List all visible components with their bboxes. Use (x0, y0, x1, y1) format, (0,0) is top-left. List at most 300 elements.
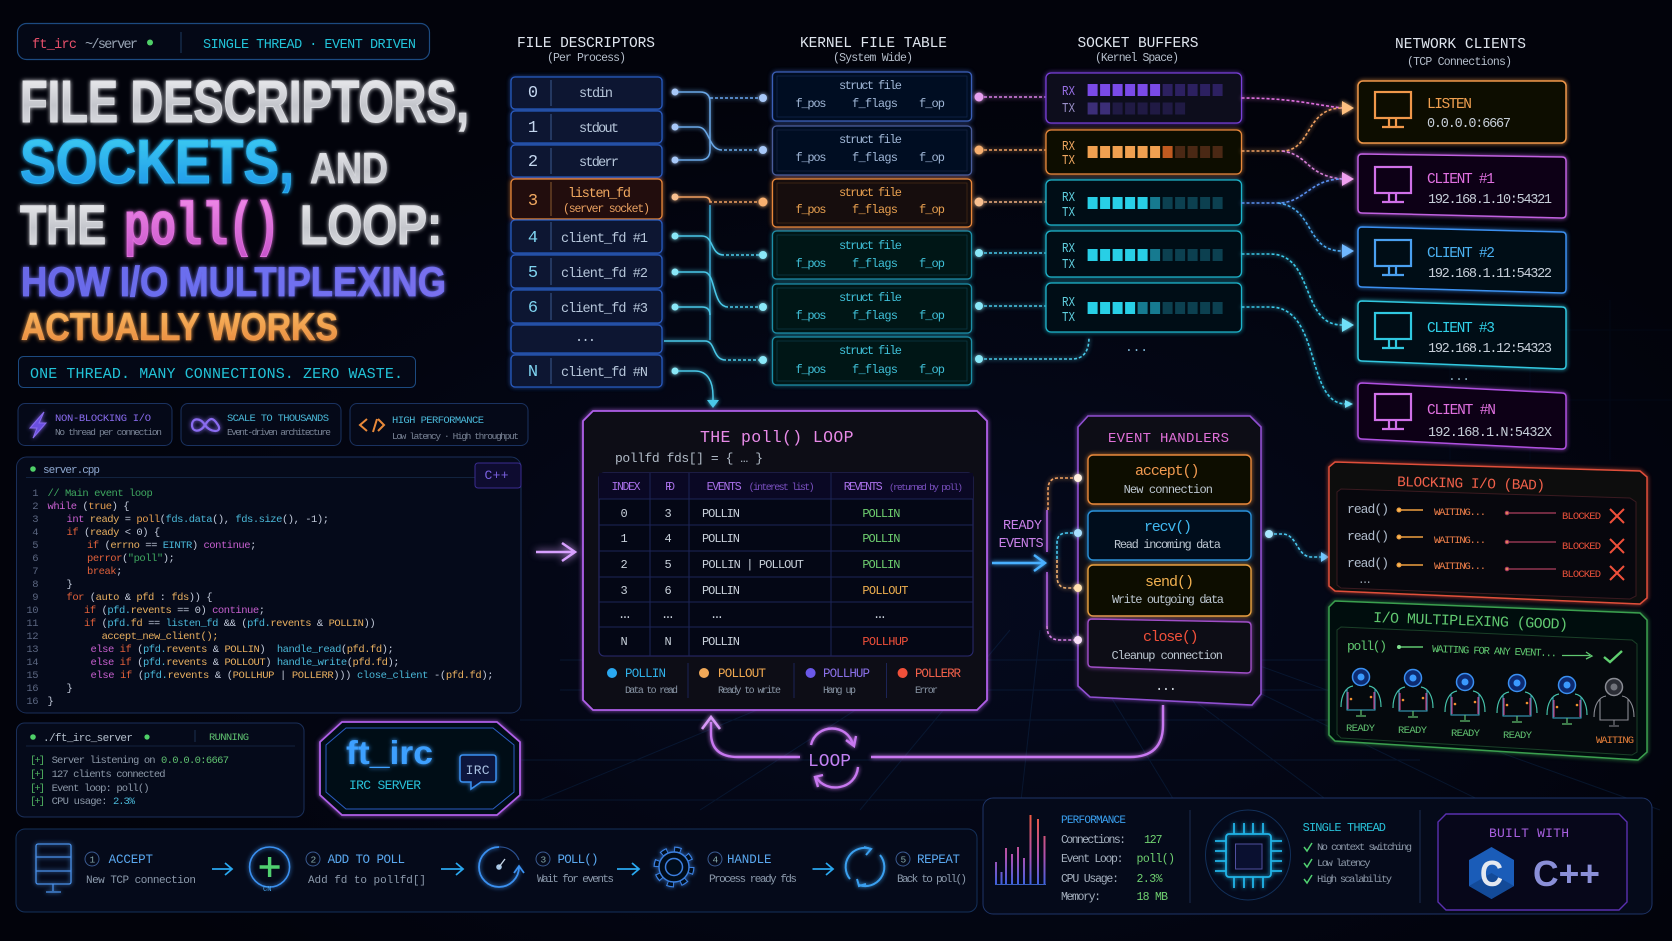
kernel file table: f_op (919, 363, 945, 377)
code lines (26, 488, 493, 708)
event legend: POLLOUT (718, 667, 766, 681)
pollfd table: POLLIN (702, 635, 740, 649)
column heading: file descriptors: FILE DESCRIPTORS (517, 36, 655, 52)
client: #3 (1358, 301, 1566, 369)
kernel file table (758, 72, 972, 385)
code lines: if (ready < 0) { (66, 527, 160, 539)
client: #3: 192.168.1.12:54323 (1428, 342, 1552, 357)
code lines: else if (pfd.revents & (POLLHUP | POLLERR))) close_client -(pfd.fd); (90, 670, 493, 682)
icon: monitor (1375, 167, 1411, 202)
event legend (607, 663, 961, 698)
step 4: handle: 4 (712, 854, 718, 866)
code lines: 9 (32, 592, 38, 604)
connectors: socket buffers to clients (1242, 98, 1346, 404)
pollfd table: POLLIN (702, 507, 740, 521)
kernel file table: f_pos (796, 363, 826, 377)
pollfd table: N (664, 635, 672, 649)
event legend: POLLIN (625, 667, 666, 681)
performance and build panel (983, 798, 1652, 914)
file descriptor table: client_fd #2 (561, 267, 648, 282)
code lines: // Main event loop (48, 488, 152, 500)
panel: blocking I/O: read() (1347, 529, 1389, 544)
icon: cpu chip (1206, 810, 1290, 900)
performance stats: 18 MB (1136, 891, 1168, 904)
terminal panel: [+] (30, 755, 45, 767)
code lines: else if (pfd.revents & POLLOUT) handle_write(pfd.fd); (90, 657, 399, 669)
terminal panel: ./ft_irc_server (43, 733, 133, 745)
kernel file table: f_flags (852, 309, 898, 323)
code lines: break; (87, 566, 122, 578)
client: #1: CLIENT #1 (1427, 172, 1495, 188)
blocked clients row: WAITING (1596, 735, 1634, 747)
column heading: kernel file table: KERNEL FILE TABLE (800, 36, 947, 52)
tagline: ONE THREAD. MANY CONNECTIONS. ZERO WASTE. (30, 366, 403, 383)
code panel (16, 457, 521, 713)
column heading: file descriptors: (Per Process) (547, 52, 626, 65)
code lines: 4 (32, 527, 38, 539)
client: #2: CLIENT #2 (1427, 246, 1495, 262)
kernel file table: f_flags (852, 151, 898, 165)
handler: recv: recv() (1144, 519, 1192, 536)
handler: accept: New connection (1124, 483, 1213, 497)
client: listen (1358, 81, 1566, 143)
performance stats: CPU Usage: (1061, 873, 1119, 886)
handler: close: Cleanup connection (1112, 649, 1223, 663)
language badge: C++ (484, 468, 509, 483)
file descriptor table: 4 (528, 229, 538, 248)
pollfd table: POLLOUT (862, 584, 908, 598)
pollfd table: N (620, 635, 628, 649)
main title: AND (310, 144, 388, 193)
performance stats: Memory: (1061, 891, 1101, 904)
header status pill: SINGLE THREAD · EVENT DRIVEN (203, 38, 416, 53)
code lines: 2 (32, 501, 38, 513)
pollfd table: 1 (620, 532, 628, 546)
file descriptor table: listen_fd (568, 187, 631, 202)
client: #N: CLIENT #N (1427, 403, 1496, 419)
main title: ACTUALLY WORKS (21, 306, 338, 349)
column heading: kernel file table: (System Wide) (833, 52, 913, 65)
event handlers panel: EVENT HANDLERS (1108, 431, 1229, 447)
kernel file table: struct file (839, 239, 902, 253)
panel: I/O multiplexing: WAITING FOR ANY EVENT... (1432, 644, 1557, 660)
blocked clients row: READY (1346, 723, 1376, 735)
poll return loop (702, 705, 1163, 787)
code lines: 6 (32, 553, 38, 565)
column heading: network clients: (TCP Connections) (1407, 56, 1512, 69)
pollfd table: POLLIN (702, 584, 740, 598)
client: #1: 192.168.1.10:54321 (1428, 193, 1552, 208)
client: #3: CLIENT #3 (1427, 321, 1495, 337)
pollfd table: POLLHUP (862, 635, 908, 649)
socket buffers: RX (1062, 85, 1075, 100)
feature: non-blocking I/O: No thread per connection (55, 427, 162, 438)
file descriptor table: stdout (579, 122, 619, 137)
icon: monitor (1375, 313, 1411, 348)
event legend: Error (915, 686, 938, 697)
file descriptor table: client_fd #1 (561, 232, 648, 247)
connectors: events to handlers (1047, 478, 1078, 640)
event legend: Hang up (823, 686, 856, 697)
file descriptor table: 5 (528, 264, 538, 283)
bottom flow panel (16, 829, 977, 912)
header status pill (18, 24, 430, 60)
panel: blocking I/O: BLOCKED (1562, 541, 1601, 553)
file descriptor table (511, 77, 662, 387)
step 1: accept: 1 (90, 854, 96, 866)
terminal panel: [+] (30, 769, 45, 781)
pollfd table (599, 473, 973, 656)
ready events label and arrow: EVENTS (999, 537, 1044, 552)
panel: blocking I/O: BLOCKED (1562, 511, 1601, 523)
file descriptor table: 3 (528, 192, 538, 211)
terminal panel: 127 clients connected (52, 769, 166, 781)
kernel file table: f_pos (796, 151, 826, 165)
pollfd table: 3 (620, 584, 628, 598)
icon: check (1604, 651, 1622, 662)
socket buffers: TX (1062, 258, 1075, 273)
main title: FILE DESCRIPTORS, (20, 69, 469, 135)
performance stats: 127 (1144, 834, 1162, 847)
arrow: code into poll loop (536, 543, 575, 561)
handler: close (1088, 619, 1251, 673)
infographic canvas: ... (1448, 369, 1470, 384)
code lines: 14 (26, 657, 38, 669)
panel: I/O multiplexing: I/O MULTIPLEXING (GOOD) (1373, 610, 1568, 634)
code lines: if (pfd.fd == listen_fd && (pfd.revents & POLLIN)) (84, 618, 375, 630)
handler: send (1088, 565, 1251, 616)
main title: THE (20, 193, 106, 256)
code lines: 8 (32, 579, 38, 591)
feature: non-blocking I/O (18, 404, 172, 446)
main title (20, 69, 469, 349)
panel: blocking I/O: read() (1347, 556, 1389, 571)
step 2: add to poll: CN (263, 886, 271, 894)
event legend: POLLERR (915, 667, 961, 681)
arrowheads into clients (1342, 101, 1354, 408)
feature: scale to thousands (181, 404, 341, 446)
kernel file table: f_op (919, 151, 945, 165)
blocked clients row (1341, 668, 1634, 747)
step 5: repeat: 5 (900, 854, 906, 866)
pollfd table: ... (618, 608, 632, 622)
icon: lightning bolt (30, 412, 46, 438)
socket buffers: RX (1062, 242, 1075, 257)
performance stats (1061, 815, 1175, 904)
step 5: repeat: Back to poll() (897, 874, 967, 886)
code lines: while (true) { (48, 501, 129, 513)
kernel file table: f_pos (796, 257, 826, 271)
pollfd table: POLLIN | POLLOUT (702, 558, 804, 572)
code lines: 7 (32, 566, 38, 578)
connectors: descriptors to kernel table (664, 88, 763, 408)
socket buffers: TX (1062, 102, 1075, 117)
arrow (617, 863, 639, 875)
socket buffers: TX (1062, 206, 1075, 221)
icon: infinity (192, 419, 219, 431)
code lines: for (auto & pfd : fds)) { (66, 592, 212, 604)
terminal panel: [+] (30, 783, 45, 795)
ft_irc badge: IRC SERVER (349, 778, 421, 793)
client: #2: 192.168.1.11:54322 (1428, 267, 1552, 282)
client: #N (1358, 383, 1566, 449)
socket buffers: TX (1062, 154, 1075, 169)
pollfd table: POLLIN (862, 558, 900, 572)
handler: recv: Read incoming data (1114, 538, 1221, 552)
built with (1438, 814, 1627, 910)
performance stats: 2.3% (1136, 873, 1163, 886)
code lines: 5 (32, 540, 38, 552)
poll loop panel: THE poll() LOOP (700, 428, 854, 447)
single thread notes (1303, 821, 1412, 886)
event handlers panel: ... (1155, 679, 1177, 695)
icon: chat bubble (460, 755, 496, 789)
pollfd table: REVENTS (844, 481, 883, 494)
code lines: 10 (26, 605, 38, 617)
code lines: } (66, 683, 72, 695)
ready events label and arrow (992, 519, 1045, 571)
pollfd table: ... (710, 608, 724, 622)
code lines: perror("poll"); (87, 553, 174, 565)
single thread notes: No context switching (1317, 842, 1412, 854)
handler: close: close() (1143, 629, 1199, 646)
file descriptor table: 1 (528, 119, 538, 138)
single thread notes: SINGLE THREAD (1303, 821, 1386, 835)
pollfd table: 0 (620, 507, 628, 521)
code lines: 13 (26, 644, 38, 656)
column heading: socket buffers (1078, 36, 1198, 65)
blocked clients row: READY (1398, 725, 1428, 737)
column heading: kernel file table (800, 36, 947, 65)
code lines: accept_new_client(); (102, 631, 218, 643)
code lines: 16 (26, 696, 38, 708)
step 2: add to poll (250, 847, 426, 894)
performance stats: Connections: (1061, 834, 1126, 847)
feature: high performance: HIGH PERFORMANCE (392, 415, 484, 427)
terminal panel: 2.3% (113, 796, 136, 808)
tagline (18, 356, 416, 388)
language badge (475, 463, 521, 488)
step 2: add to poll: 2 (310, 854, 316, 866)
pollfd table: (returned by poll) (889, 482, 963, 493)
terminal panel: Server listening on (52, 755, 156, 767)
performance stats: poll() (1136, 853, 1175, 866)
icon: monitor (1375, 240, 1411, 275)
step 3: poll: Wait for events (537, 874, 614, 886)
poll loop panel: pollfd fds[] = { … } (615, 451, 763, 466)
pollfd table: INDEX (612, 481, 641, 494)
feature: high performance: Low latency · High throughput (392, 431, 519, 442)
socket buffers: RX (1062, 296, 1075, 311)
arrow: recv to blocking comparison (1265, 530, 1329, 562)
kernel file table: struct file (839, 186, 902, 200)
panel: blocking I/O: BLOCKING I/O (BAD) (1397, 475, 1545, 495)
icon: code brackets (360, 419, 384, 432)
kernel file table: f_flags (852, 97, 898, 111)
code lines: 16 (26, 683, 38, 695)
code lines: else if (pfd.revents & POLLIN) handle_read(pfd.fd); (90, 644, 393, 656)
column heading: file descriptors (517, 36, 655, 65)
pollfd table: 4 (664, 532, 672, 546)
terminal panel: RUNNING (209, 732, 249, 744)
ft_irc badge: ft_irc (346, 734, 433, 771)
kernel file table: f_op (919, 203, 945, 217)
client: listen: LISTEN (1427, 97, 1472, 113)
kernel file table: f_op (919, 97, 945, 111)
client: listen: 0.0.0.0:6667 (1427, 117, 1511, 132)
kernel file table: f_flags (852, 363, 898, 377)
handler: accept: accept() (1135, 463, 1200, 480)
pollfd table: FD (665, 481, 675, 494)
file descriptor table: client_fd #N (561, 366, 648, 381)
poll return loop: LOOP (808, 752, 851, 772)
step 5: repeat (846, 847, 967, 886)
arrow (812, 863, 833, 875)
step 4: handle: HANDLE (727, 853, 772, 867)
step 3: poll (479, 847, 614, 887)
kernel file table: f_pos (796, 203, 826, 217)
code lines: if (errno == EINTR) continue; (87, 540, 256, 552)
code lines: if (pfd.revents == 0) continue; (84, 605, 265, 617)
kernel file table: f_op (919, 309, 945, 323)
ready events label and arrow: READY (1003, 519, 1042, 534)
column heading: network clients (1395, 37, 1526, 69)
step 1: accept (36, 844, 196, 892)
pollfd table: EVENTS (707, 481, 742, 494)
column heading: network clients: NETWORK CLIENTS (1395, 37, 1526, 53)
step 4: handle: Process ready fds (709, 874, 797, 886)
socket buffers: TX (1062, 311, 1075, 326)
feature: high performance (350, 404, 528, 446)
pollfd table: POLLIN (702, 532, 740, 546)
kernel file table: f_flags (852, 203, 898, 217)
loop icon (811, 728, 858, 787)
client: #1 (1358, 154, 1566, 218)
performance stats: Event Loop: (1061, 853, 1124, 866)
code lines: } (66, 579, 72, 591)
kernel file table: f_pos (796, 97, 826, 111)
code lines: } (48, 696, 54, 708)
terminal panel: Event loop: poll() (52, 783, 150, 795)
icon: monitor (1375, 394, 1411, 429)
event handlers panel (1074, 416, 1261, 705)
file descriptor table: 2 (528, 153, 538, 172)
file descriptor table: N (528, 363, 538, 382)
file descriptor table: stdin (579, 87, 613, 102)
event legend: Data to read (625, 685, 678, 697)
handler: accept (1088, 455, 1251, 504)
panel: blocking I/O: WAITING... (1434, 561, 1486, 573)
terminal panel (16, 723, 304, 817)
panel: blocking I/O: WAITING... (1434, 507, 1486, 519)
feature: non-blocking I/O: NON-BLOCKING I/O (55, 413, 151, 425)
event legend: Ready to write (718, 685, 781, 697)
socket buffers: RX (1062, 191, 1075, 206)
column heading: socket buffers: (Kernel Space) (1095, 52, 1179, 65)
panel: blocking I/O: ... (1358, 575, 1372, 587)
file descriptor table: ... (575, 331, 596, 346)
main title: LOOP: (300, 193, 442, 256)
arrow (212, 863, 232, 875)
column heading: socket buffers: SOCKET BUFFERS (1078, 36, 1198, 52)
panel: I/O multiplexing: poll() (1347, 639, 1387, 654)
file descriptor table: (server socket) (563, 203, 650, 216)
buffer fill cells (1088, 90, 1225, 308)
blocked clients row: READY (1503, 730, 1533, 742)
icons: blocked crosses (1610, 509, 1624, 580)
feature: scale to thousands: Event-driven architecture (227, 427, 331, 438)
connectors: kernel table to socket buffers (974, 92, 1089, 363)
pollfd table: POLLIN (862, 532, 900, 546)
socket buffers: ... (1125, 340, 1148, 355)
pollfd table: ... (873, 608, 887, 622)
step 2: add to poll: ADD TO POLL (328, 853, 405, 867)
header status pill: ~/server (85, 38, 138, 53)
handler: recv (1088, 511, 1251, 560)
file descriptor table: stderr (579, 156, 619, 171)
main title: HOW I/O MULTIPLEXING (21, 258, 446, 305)
code lines: 11 (26, 618, 38, 630)
icon: C hexagon: C (1480, 853, 1503, 894)
code lines: 1 (32, 488, 38, 500)
pollfd table: 3 (664, 507, 672, 521)
kernel file table: f_pos (796, 309, 826, 323)
kernel file table: struct file (839, 344, 902, 358)
pollfd table: 6 (664, 584, 672, 598)
poll loop panel (583, 411, 987, 710)
pollfd table: 5 (664, 558, 672, 572)
pollfd table: 2 (620, 558, 628, 572)
ft_irc badge: IRC (466, 763, 490, 778)
kernel file table: f_flags (852, 257, 898, 271)
kernel file table: struct file (839, 291, 902, 305)
panel: blocking I/O: WAITING... (1434, 535, 1486, 547)
blocked clients row: READY (1451, 728, 1481, 740)
icon: C hexagon (1469, 847, 1514, 899)
handler: send: send() (1145, 574, 1194, 591)
single thread notes: High scalability (1317, 874, 1392, 886)
code lines: 12 (26, 631, 38, 643)
step 4: handle (656, 850, 797, 886)
kernel file table: struct file (839, 133, 902, 147)
built with: C++ (1533, 853, 1600, 894)
panel: blocking I/O: BLOCKED (1562, 569, 1601, 581)
step 1: accept: ACCEPT (109, 853, 153, 867)
icon: monitor (1375, 92, 1411, 127)
code lines: 3 (32, 514, 38, 526)
socket buffers: RX (1062, 140, 1075, 155)
step 3: poll: POLL() (558, 853, 598, 867)
step 1: accept: New TCP connection (86, 875, 196, 887)
panel: I/O multiplexing (1329, 601, 1647, 760)
main title: poll() (124, 195, 280, 263)
handler: send: Write outgoing data (1112, 593, 1224, 607)
terminal panel: 0.0.0.0:6667 (161, 755, 229, 767)
header status pill: ft_irc (32, 38, 77, 53)
ft_irc badge (320, 722, 520, 815)
performance stats: PERFORMANCE (1061, 815, 1126, 827)
client: #N: 192.168.1.N:5432X (1428, 426, 1552, 441)
built with: BUILT WITH (1489, 826, 1569, 841)
kernel file table: f_op (919, 257, 945, 271)
event legend: POLLHUP (823, 667, 870, 681)
kernel file table: struct file (839, 79, 902, 93)
socket buffers (1046, 73, 1242, 355)
code lines: 15 (26, 670, 38, 682)
client: #2 (1358, 227, 1566, 293)
main title: SOCKETS, (20, 128, 294, 197)
terminal panel: CPU usage: (52, 796, 108, 808)
